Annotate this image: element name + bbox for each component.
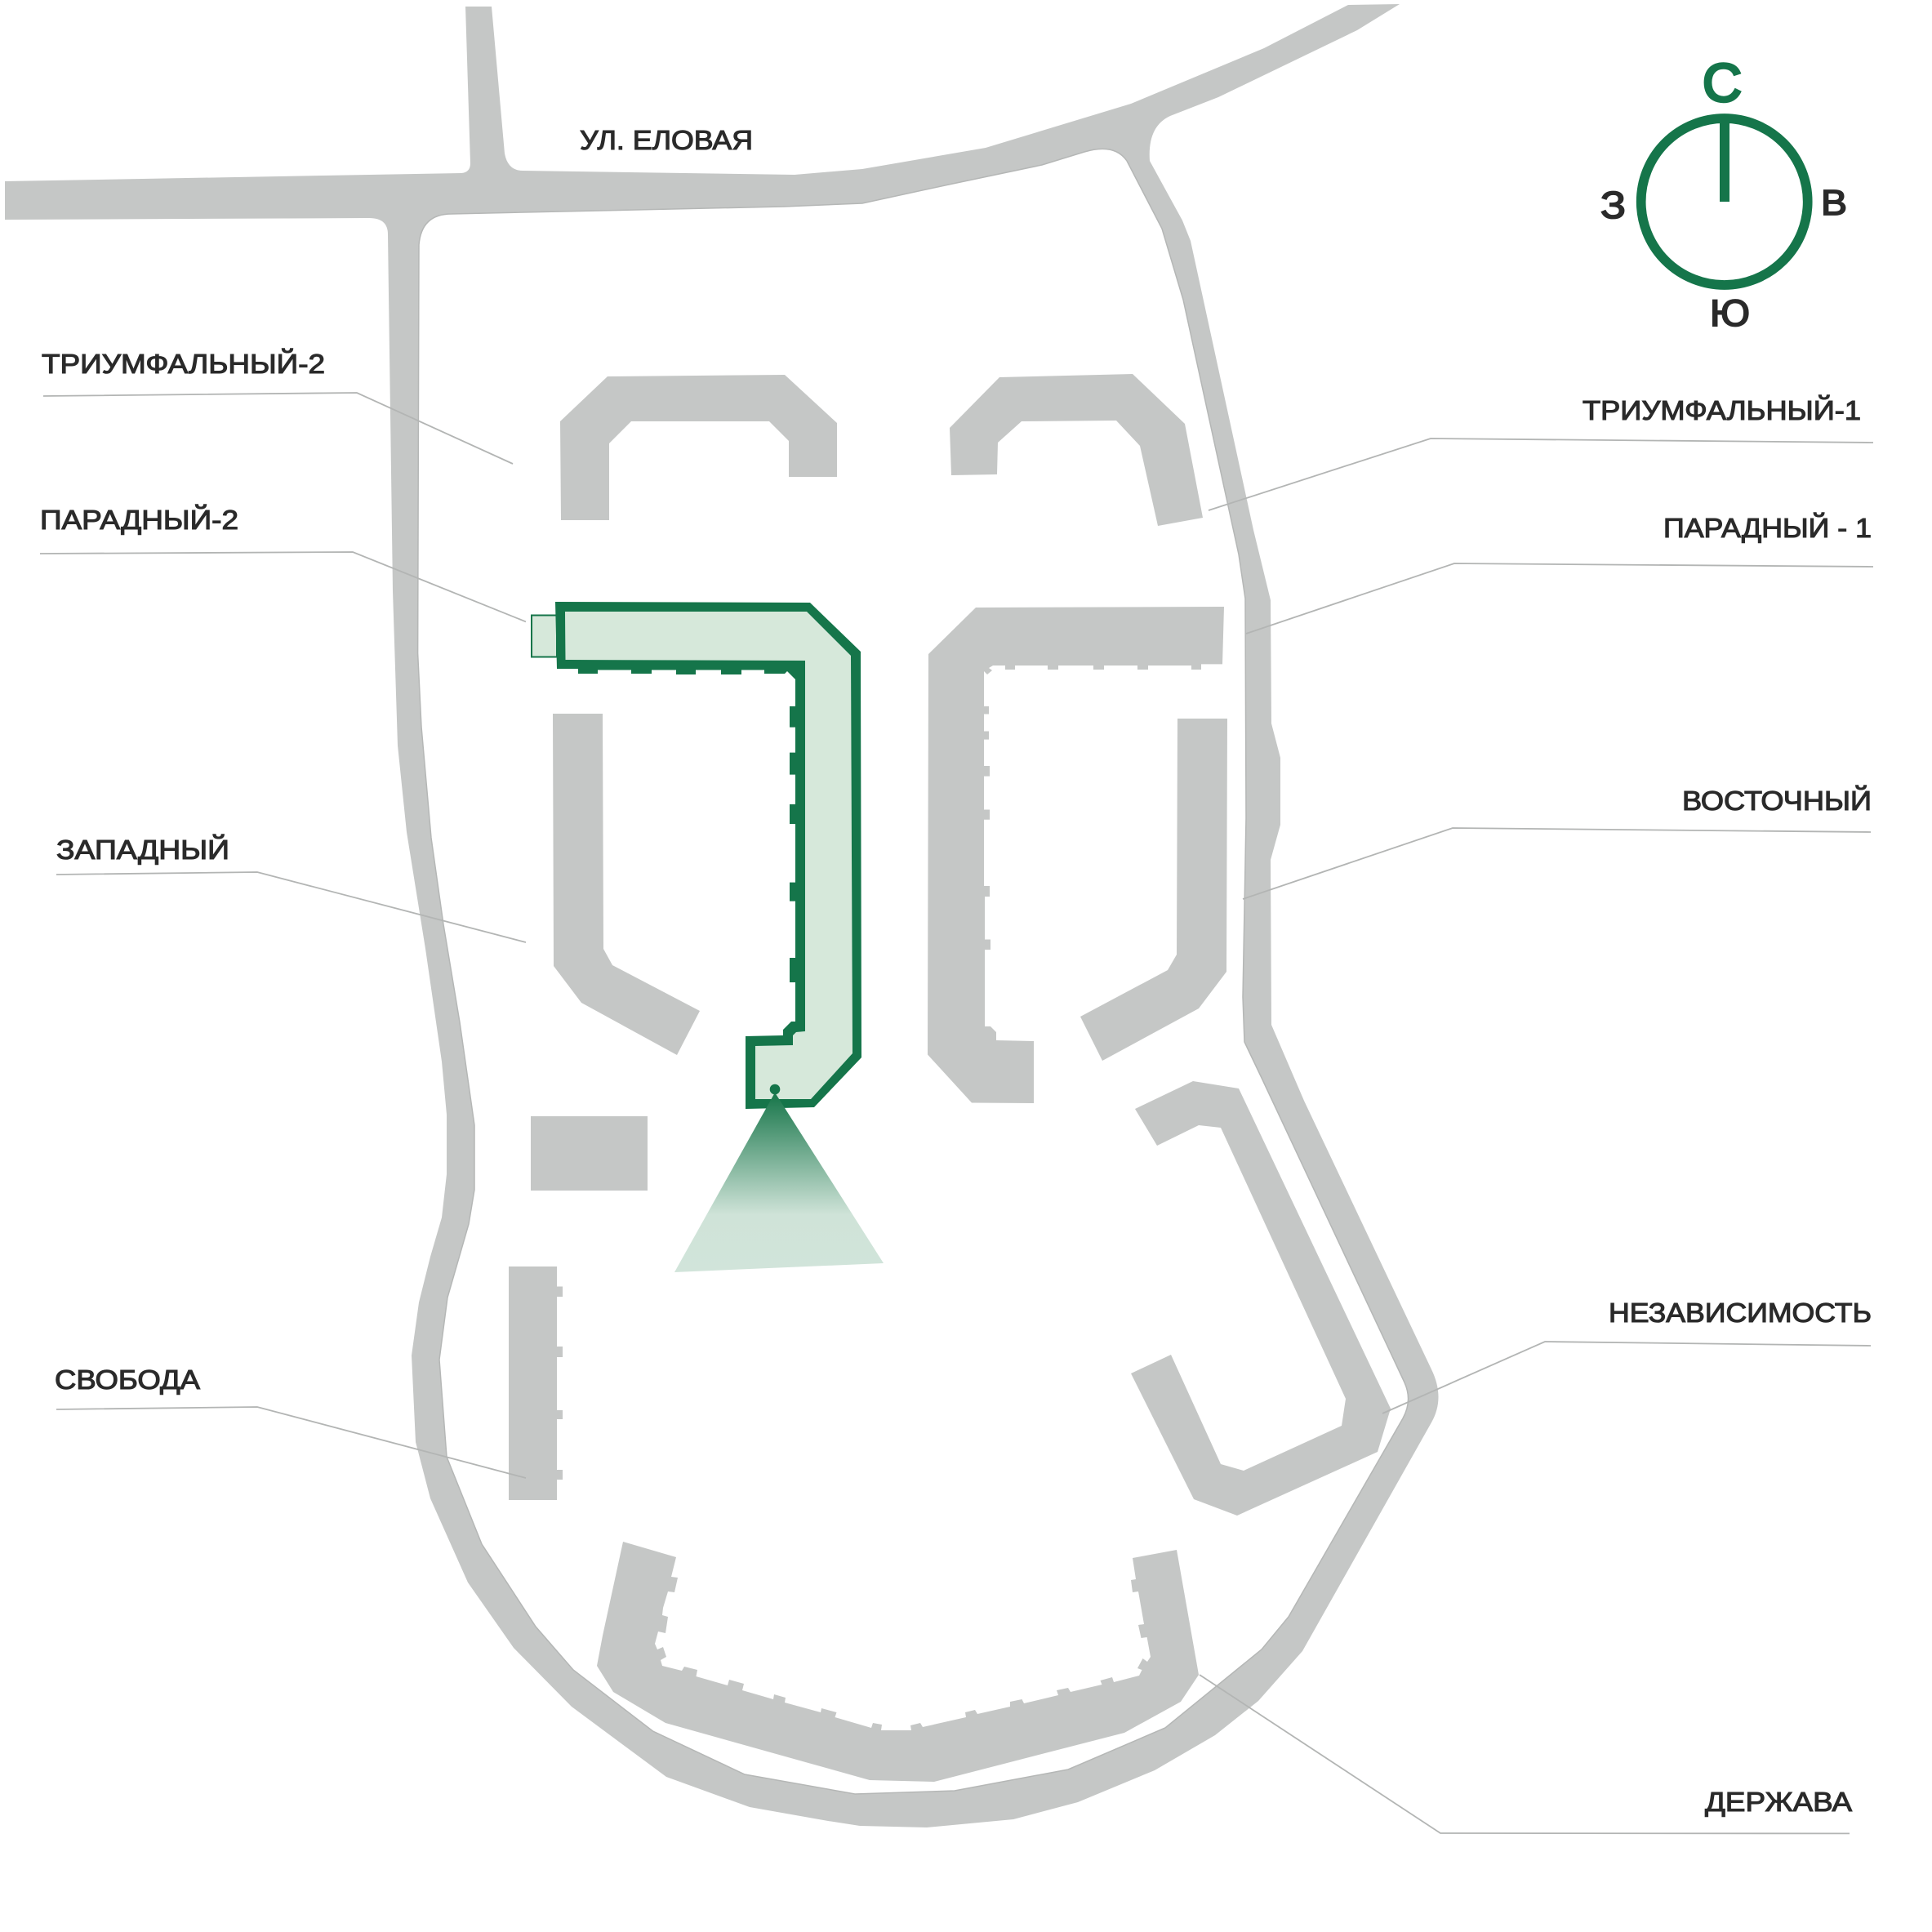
- street label: УЛ. ЕЛОВАЯ: [580, 125, 753, 155]
- compass needle: [1720, 118, 1729, 202]
- compass dial: [1641, 118, 1808, 285]
- label: Независимость: НЕЗАВИСИМОСТЬ: [1609, 1298, 1872, 1328]
- label: Держава: ДЕРЖАВА: [1705, 1787, 1852, 1817]
- leader line: Западный: [56, 872, 526, 942]
- ring road and street: [5, 4, 1439, 1827]
- leader line: Держава: [1200, 1675, 1850, 1833]
- label: Парадный-2: ПАРАДНЫЙ-2: [40, 505, 238, 535]
- highlighted building: [555, 602, 861, 1109]
- compass: [1600, 52, 1847, 334]
- leader line: Восточный: [1243, 828, 1871, 899]
- compass north: С: [1703, 52, 1742, 113]
- leader line: Свобода: [56, 1407, 526, 1478]
- leader line: Независимость: [1382, 1342, 1871, 1413]
- building: Триумфальный-2: [560, 375, 837, 520]
- leader line: Триумфальный-2: [43, 393, 513, 464]
- leader line: Парадный-1: [1246, 563, 1873, 634]
- label: Триумфальный-1: ТРИУМФАЛЬНЫЙ-1: [1583, 395, 1861, 425]
- building: Восточный: [1080, 719, 1227, 1061]
- label: Восточный: ВОСТОЧНЫЙ: [1682, 786, 1872, 816]
- building: Держава: [597, 1542, 1199, 1782]
- building: Триумфальный-1: [950, 374, 1203, 526]
- viewpoint marker: [770, 1084, 780, 1094]
- building: Западный: [553, 714, 700, 1055]
- label: Парадный - 1: ПАРАДНЫЙ - 1: [1663, 513, 1872, 543]
- building: Независимость: [1131, 1081, 1391, 1516]
- label: Триумфальный-2: ТРИУМФАЛЬНЫЙ-2: [42, 349, 325, 379]
- building: Парадный-1: [928, 607, 1224, 1103]
- building: small block: [531, 1116, 648, 1191]
- compass east: В: [1821, 183, 1847, 223]
- compass south: Ю: [1710, 292, 1750, 334]
- building: Свобода: [509, 1266, 563, 1500]
- leader line: Триумфальный-1: [1209, 438, 1873, 510]
- annex of highlighted building: [532, 616, 557, 657]
- label: Свобода: СВОБОДА: [55, 1364, 200, 1395]
- view cone: [674, 1093, 884, 1272]
- label: Западный: ЗАПАДНЫЙ: [56, 835, 229, 865]
- compass west: З: [1600, 184, 1626, 226]
- leader line: Парадный-2: [40, 552, 526, 621]
